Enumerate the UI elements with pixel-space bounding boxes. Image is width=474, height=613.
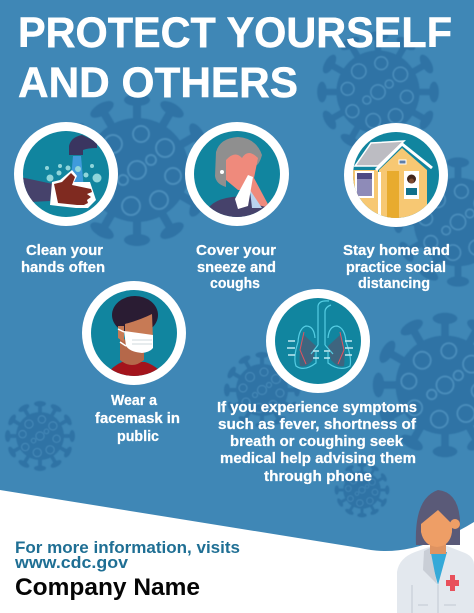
label: cover sneeze: sneeze and bbox=[197, 259, 276, 276]
label: cover sneeze: coughs bbox=[210, 275, 260, 292]
label: stay home: distancing bbox=[358, 275, 430, 292]
label: cover sneeze bbox=[196, 242, 276, 292]
company name: Company Name bbox=[15, 574, 200, 601]
icon: house bbox=[344, 123, 448, 227]
label: stay home: Stay home and bbox=[343, 242, 450, 259]
more information text: www.cdc.gov bbox=[14, 553, 129, 572]
icon: face mask bbox=[82, 281, 186, 385]
label: cover sneeze: Cover your bbox=[196, 242, 276, 259]
label: stay home: practice social bbox=[346, 259, 446, 276]
label: symptoms: medical help advising them bbox=[220, 450, 416, 467]
icon: doctor bbox=[397, 490, 474, 613]
label: facemask: public bbox=[117, 428, 159, 445]
icon: covering sneeze bbox=[185, 122, 289, 226]
label: symptoms: through phone bbox=[264, 468, 372, 485]
icon: lungs bbox=[266, 289, 370, 393]
label: stay home bbox=[343, 242, 450, 292]
white footer area bbox=[0, 490, 474, 613]
label: symptoms bbox=[217, 399, 417, 485]
title bbox=[18, 9, 452, 107]
icon: washing hands bbox=[14, 122, 118, 226]
label: facemask: facemask in bbox=[95, 410, 180, 427]
more information text: For more information, visits bbox=[15, 538, 240, 557]
title: AND OTHERS bbox=[18, 59, 298, 107]
label: clean hands: Clean your bbox=[26, 242, 103, 259]
label: symptoms: breath or coughing seek bbox=[230, 433, 404, 450]
label: symptoms: If you experience symptoms bbox=[217, 399, 417, 416]
more information text bbox=[14, 538, 240, 572]
virus background pattern bbox=[5, 31, 474, 517]
label: symptoms: such as fever, shortness of bbox=[218, 416, 417, 433]
label: clean hands: hands often bbox=[21, 259, 105, 276]
label: clean hands bbox=[21, 242, 105, 276]
label: facemask: Wear a bbox=[111, 392, 158, 409]
title: PROTECT YOURSELF bbox=[18, 9, 452, 57]
label: facemask bbox=[95, 392, 180, 445]
